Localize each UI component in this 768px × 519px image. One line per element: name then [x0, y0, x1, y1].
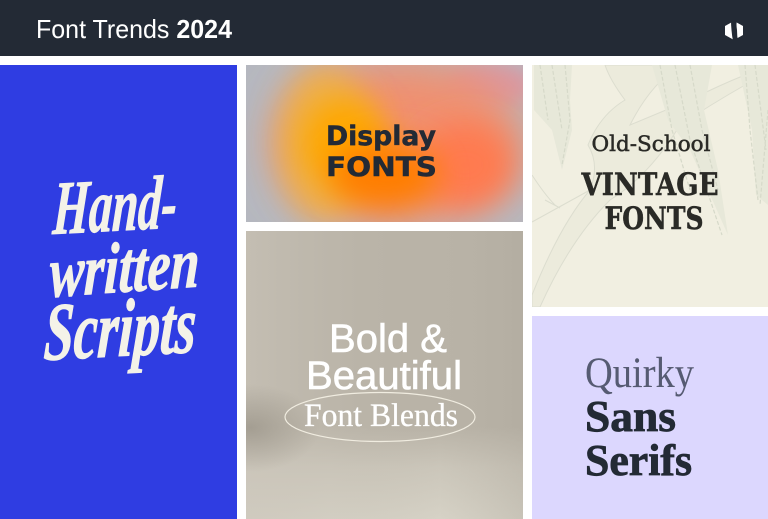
heading: quirky: Quirky: [585, 350, 694, 397]
heading: sans serifs: [585, 392, 692, 485]
heading: bold and beautiful: Bold &: [329, 317, 447, 361]
heading: handwritten scripts: [42, 160, 201, 378]
heading: display fonts: FONTS: [326, 152, 437, 183]
heading: display fonts: [328, 124, 436, 177]
heading: handwritten scripts: Hand-: [50, 160, 179, 251]
heading: sans serifs: Sans: [585, 392, 676, 441]
heading: bold and beautiful: [309, 322, 460, 390]
icon: logo: [725, 20, 743, 41]
title: Font Trends 2024: [36, 14, 233, 44]
heading: sans serifs: Serifs: [585, 436, 692, 485]
heading: display fonts: Display: [326, 121, 436, 152]
heading: handwritten scripts: Scripts: [42, 279, 199, 378]
panel: handwritten scripts: [0, 65, 237, 519]
panel: display fonts: [246, 65, 523, 222]
panel: vintage fonts: [532, 65, 768, 307]
header bar: [0, 0, 768, 56]
heading: vintage fonts: VINTAGE: [581, 167, 718, 203]
heading: bold and beautiful: Beautiful: [306, 354, 462, 398]
heading: handwritten scripts: written: [48, 222, 201, 313]
panel: bold and beautiful font blends: [246, 231, 523, 519]
ellipse outline: [285, 392, 475, 442]
panel: quirky sans serifs: [532, 316, 768, 519]
heading: vintage fonts: [581, 172, 718, 230]
illustration: willow branches: [532, 65, 768, 307]
subheading: font blends: Font Blends: [304, 398, 458, 434]
heading: old-school: Old-School: [592, 132, 711, 156]
heading: vintage fonts: FONTS: [604, 201, 704, 237]
